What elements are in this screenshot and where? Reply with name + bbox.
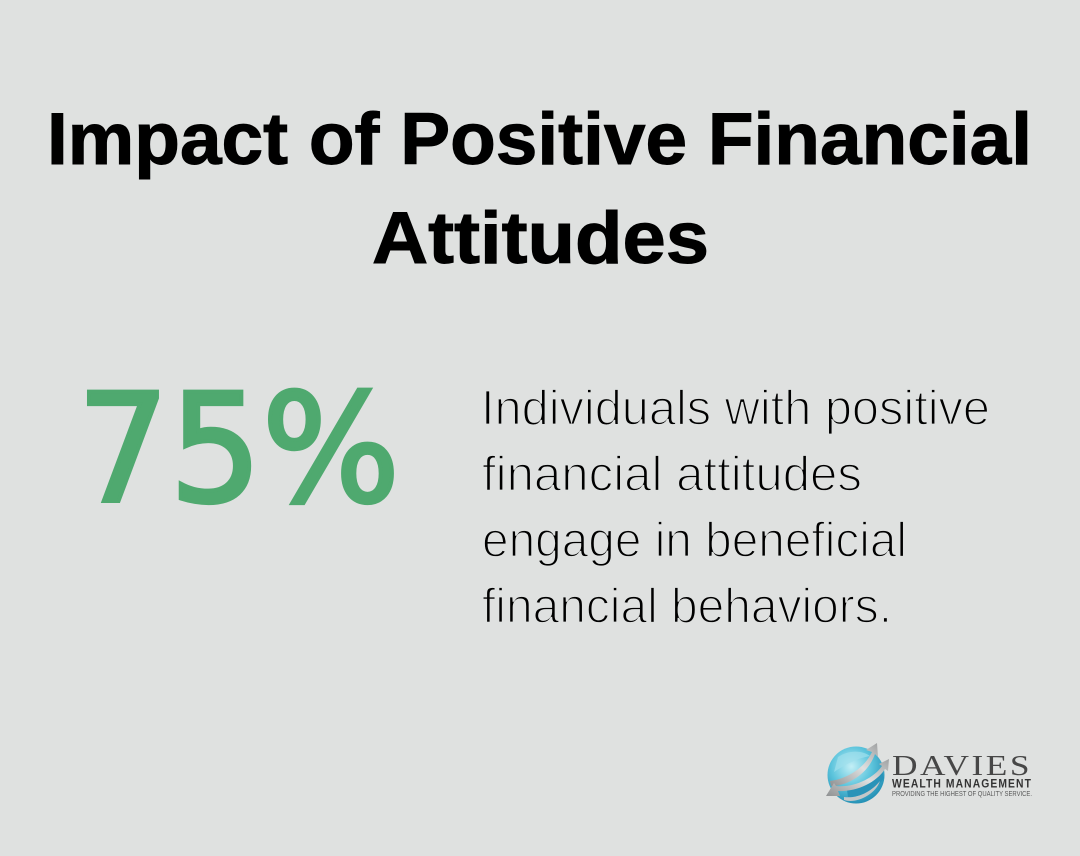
wordmark: DAVIES	[892, 751, 1032, 782]
tagline: PROVIDING THE HIGHEST OF QUALITY SERVICE.	[892, 791, 1032, 798]
title	[47, 99, 1032, 279]
description text: engage in beneficial	[482, 514, 907, 568]
title: Attitudes	[372, 198, 709, 279]
description text: Individuals with positive	[481, 382, 990, 436]
description text: financial attitudes	[482, 448, 862, 502]
logo: Davies Wealth Management	[826, 743, 1032, 804]
title: Impact of Positive Financial	[47, 99, 1032, 180]
description text	[481, 382, 990, 634]
description text: financial behaviors.	[482, 580, 892, 634]
icon: globe with arrows	[826, 743, 889, 804]
wordmark subtitle: WEALTH MANAGEMENT	[892, 778, 1032, 790]
statistic: 75%: 75%	[77, 363, 400, 537]
